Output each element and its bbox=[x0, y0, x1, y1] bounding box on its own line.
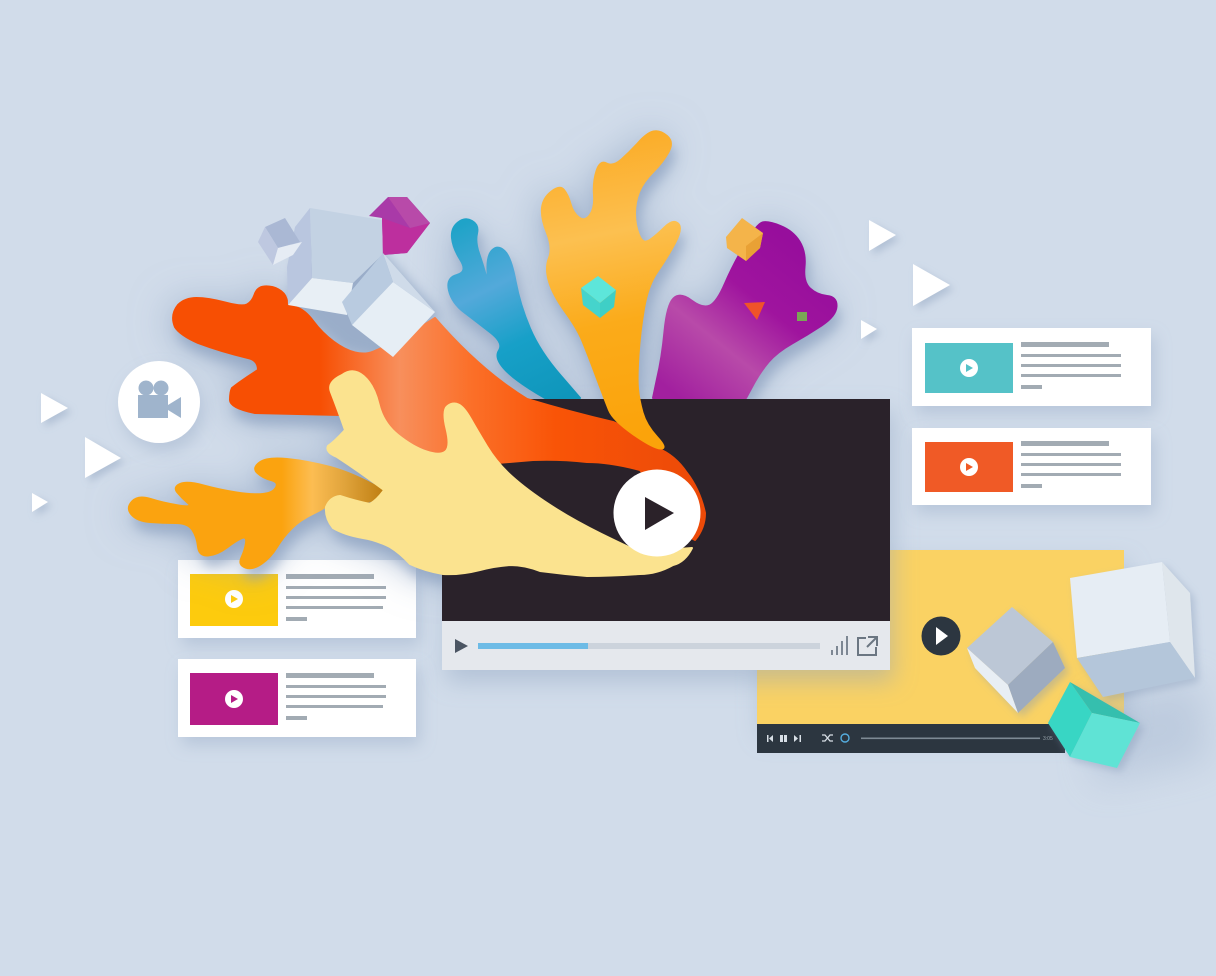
cube: pale large right bbox=[1070, 562, 1195, 697]
control bar bbox=[442, 621, 890, 670]
splash: red-orange body bbox=[173, 286, 705, 540]
cube: teal large bbox=[1048, 682, 1140, 768]
cube: pale large, upper left bbox=[287, 208, 382, 315]
splash: pale yellow hand bbox=[326, 371, 692, 576]
icon: green square bbox=[797, 312, 807, 321]
player control bar: 3:05 bbox=[1043, 736, 1053, 742]
cube: pale lower bbox=[342, 253, 435, 357]
splash: blue bbox=[448, 219, 580, 398]
card: teal bbox=[912, 328, 1151, 406]
card: yellow bbox=[178, 560, 416, 638]
card: magenta bbox=[178, 659, 416, 737]
icons: decorative play triangles bbox=[32, 220, 950, 512]
cast shadow of right cubes bbox=[1090, 680, 1210, 785]
cube: orange small bbox=[726, 218, 763, 261]
cube: pale medium bbox=[967, 607, 1065, 713]
splash: amber flame bbox=[542, 131, 680, 449]
video player: secondary yellow bbox=[757, 550, 1124, 753]
card: orange bbox=[912, 428, 1151, 505]
cube: teal small bbox=[581, 276, 616, 318]
cube: purple hexagon bbox=[369, 197, 430, 255]
main video player bbox=[442, 399, 890, 670]
cast shadows of splashes bbox=[129, 131, 837, 576]
cast shadow of cubes bbox=[288, 240, 440, 362]
icon: video camera badge bbox=[118, 361, 200, 443]
icon: red triangle bbox=[744, 302, 765, 320]
splash: left amber bbox=[129, 458, 383, 568]
player control bar bbox=[757, 724, 1065, 753]
play button: dark bbox=[922, 616, 960, 656]
cube: small pale left bbox=[258, 218, 302, 265]
play button: main bbox=[614, 470, 700, 556]
splash: purple bbox=[653, 222, 837, 398]
